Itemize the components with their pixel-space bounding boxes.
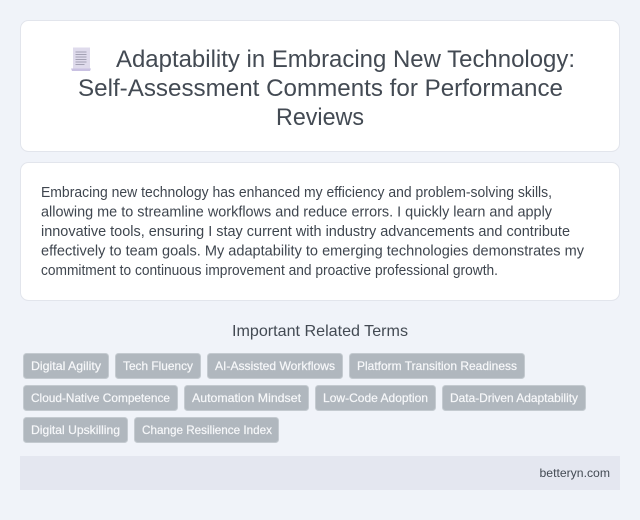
tag: Data-Driven Adaptability xyxy=(442,386,586,410)
tag: Automation Mindset xyxy=(184,386,308,410)
tag: Change Resilience Index xyxy=(134,418,278,442)
tag: Digital Upskilling xyxy=(24,418,128,442)
text block: self-assessment comment: effectively to team goals. My adaptability to emerging technologies demonstrates my xyxy=(41,244,585,260)
tag: Low-Code Adoption xyxy=(316,386,436,410)
panel: summary paragraph xyxy=(20,162,620,300)
text block: self-assessment comment: innovative tools, ensuring I stay current with industry advancements and contribute xyxy=(41,224,570,240)
text block: self-assessment comment: commitment to continuous improvement and proactive professional growth. xyxy=(41,263,498,279)
tag: Digital Agility: Digital Agility xyxy=(31,359,101,373)
text block: self-assessment comment: Embracing new technology has enhanced my efficiency and problem-solving skills, xyxy=(41,185,552,201)
tag: Tech Fluency: Tech Fluency xyxy=(123,359,193,373)
tag: Cloud-Native Competence: Cloud-Native Competence xyxy=(31,391,170,405)
tags: related terms xyxy=(24,354,586,442)
tag: Platform Transition Readiness xyxy=(350,354,524,378)
footer xyxy=(20,456,620,490)
tag: Tech Fluency xyxy=(116,354,200,378)
text block: self-assessment comment: allowing me to streamline workflows and reduce errors. I quickly learn and apply xyxy=(41,204,553,220)
text block: self-assessment comment xyxy=(41,185,585,279)
tag: Digital Agility xyxy=(24,354,108,378)
tag: Platform Transition Readiness: Platform Transition Readiness xyxy=(357,359,517,373)
heading: related terms: Important Related Terms xyxy=(232,323,408,340)
panel: title card xyxy=(20,20,620,152)
tag: Cloud-Native Competence xyxy=(24,386,178,410)
tag: Automation Mindset: Automation Mindset xyxy=(192,391,302,405)
tag: Low-Code Adoption: Low-Code Adoption xyxy=(323,391,428,405)
title: Self-Assessment Comments for Performance xyxy=(78,75,563,102)
tag: Change Resilience Index: Change Resilience Index xyxy=(142,423,272,437)
tag: AI-Assisted Workflows xyxy=(208,354,342,378)
title: Adaptability in Embracing New Technology: xyxy=(116,46,575,73)
footer: source: betteryn.com xyxy=(540,466,610,480)
tag: Data-Driven Adaptability: Data-Driven Adaptability xyxy=(450,391,578,405)
icon: scroll document xyxy=(71,48,91,71)
tag: Digital Upskilling: Digital Upskilling xyxy=(31,423,120,437)
title: Reviews xyxy=(276,104,364,131)
title xyxy=(78,46,575,131)
tag: AI-Assisted Workflows: AI-Assisted Workflows xyxy=(215,359,335,373)
